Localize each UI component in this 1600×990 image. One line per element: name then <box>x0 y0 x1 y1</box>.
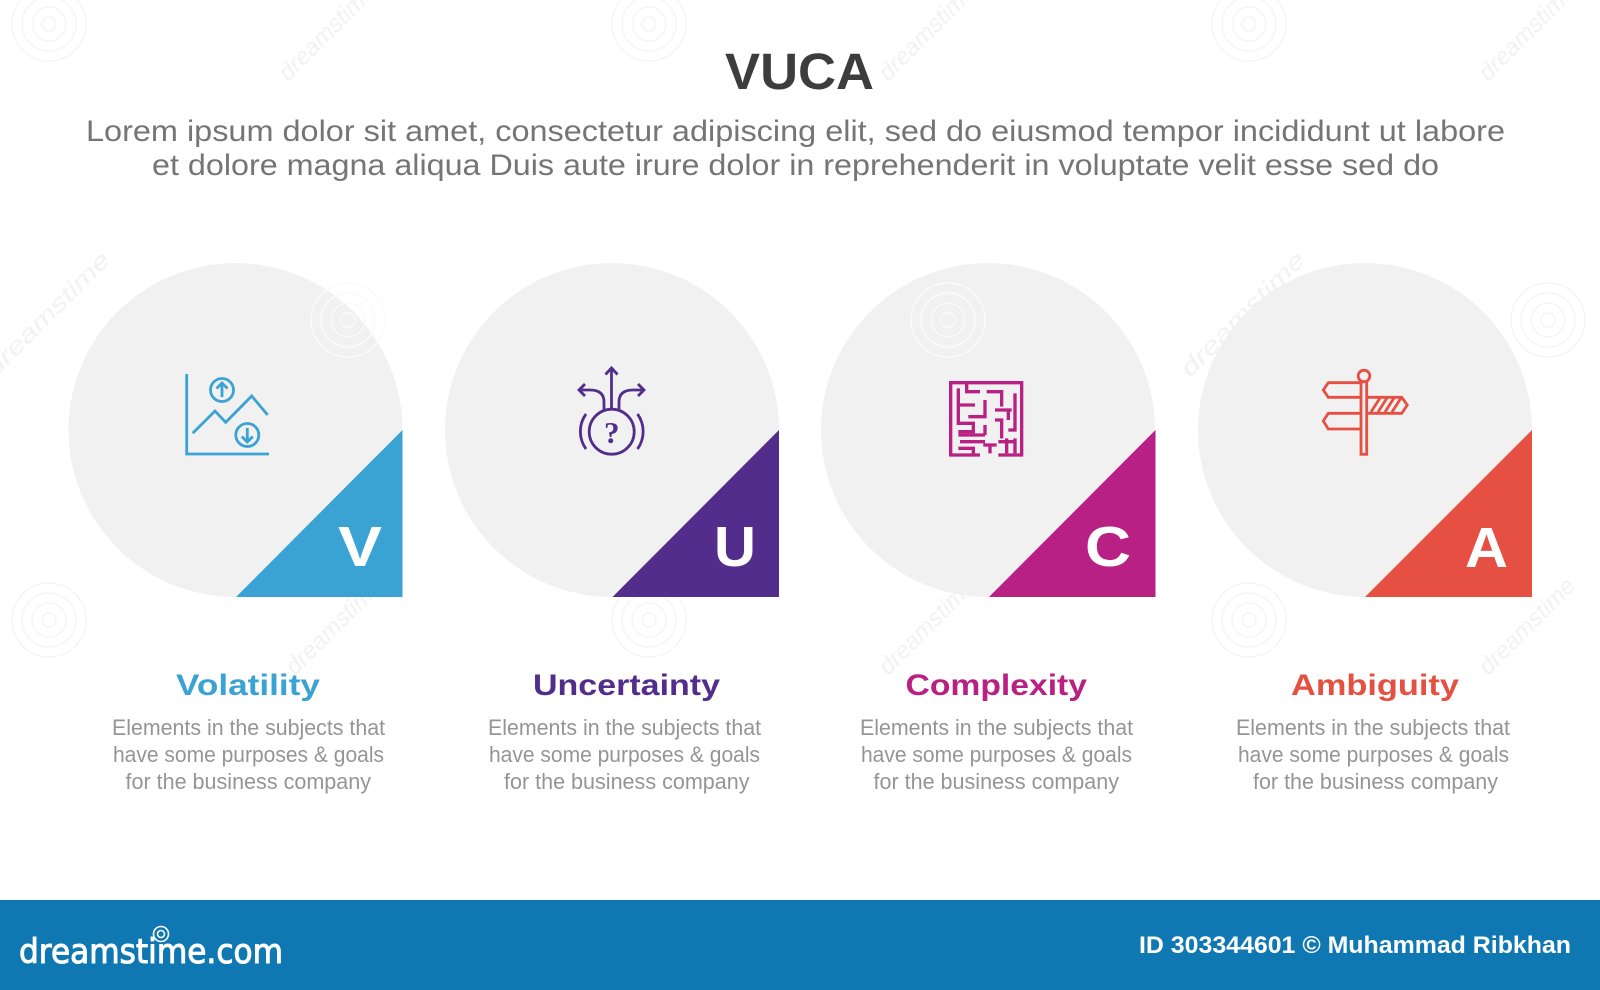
heading: Uncertainty: Uncertainty <box>533 669 720 702</box>
letter V: V <box>338 515 382 579</box>
subtitle text: et dolore magna aliqua Duis aute irure dolor in reprehenderit in voluptate velit esse sed do <box>152 149 1439 182</box>
description: Complexity <box>860 715 1133 794</box>
icon: branching arrows with question mark: ? <box>604 415 619 450</box>
icon: signpost <box>1323 370 1407 454</box>
panel: uncertainty <box>445 263 779 794</box>
heading: Volatility: Volatility <box>176 669 320 702</box>
subtitle text <box>86 115 1505 182</box>
subtitle text: Lorem ipsum dolor sit amet, consectetur adipiscing elit, sed do eiusmod tempor incididunt ut labore <box>86 115 1505 148</box>
heading: Complexity: Complexity <box>906 669 1087 702</box>
corner triangle: volatility <box>236 430 402 597</box>
circle background: volatility <box>68 263 402 597</box>
letter C: C <box>1085 515 1131 579</box>
description: Complexity: Elements in the subjects that <box>860 715 1133 740</box>
description: Uncertainty <box>488 715 761 794</box>
footer credit: ID 303344601 © Muhammad Ribkhan <box>1139 932 1571 959</box>
text: dreamstime <box>1175 246 1311 382</box>
description: Uncertainty: for the business company <box>504 769 750 794</box>
icon: maze <box>951 383 1022 455</box>
description: Volatility <box>112 715 385 794</box>
corner triangle: ambiguity <box>1365 430 1532 597</box>
description: Ambiguity: have some purposes & goals <box>1238 742 1509 767</box>
letter A: A <box>1465 516 1508 580</box>
circle background: complexity <box>821 263 1155 597</box>
footer bar <box>0 900 1600 990</box>
corner triangle: complexity <box>989 430 1156 597</box>
panel: volatility <box>68 263 402 794</box>
letter U: U <box>714 515 756 579</box>
description: Uncertainty: have some purposes & goals <box>489 742 760 767</box>
footer logo: dreamstime.com: dreamstime.com <box>19 932 283 972</box>
description: Volatility: have some purposes & goals <box>113 742 384 767</box>
text: dreamstime <box>873 572 981 680</box>
description: Uncertainty: Elements in the subjects that <box>488 715 761 740</box>
icon: logo spiral <box>154 926 168 942</box>
text: dreamstime <box>1473 572 1581 680</box>
description: Ambiguity: Elements in the subjects that <box>1236 715 1510 740</box>
circle background: ambiguity <box>1198 263 1532 597</box>
title: VUCA <box>725 43 874 100</box>
panel: ambiguity <box>1198 263 1585 794</box>
corner triangle: uncertainty <box>612 430 779 597</box>
circle background: uncertainty <box>445 263 779 597</box>
description: Volatility: for the business company <box>126 769 371 794</box>
description: Complexity: have some purposes & goals <box>861 742 1132 767</box>
panel: complexity <box>821 263 1156 794</box>
text: dreamstime <box>280 572 388 680</box>
heading: Ambiguity: Ambiguity <box>1291 669 1459 702</box>
icon: branching arrows with question mark <box>579 368 644 454</box>
icon: chart with up and down arrows <box>187 374 269 454</box>
description: Volatility: Elements in the subjects that <box>112 715 385 740</box>
description: Complexity: for the business company <box>874 769 1119 794</box>
description: Ambiguity: for the business company <box>1253 769 1498 794</box>
description: Ambiguity <box>1236 715 1510 794</box>
